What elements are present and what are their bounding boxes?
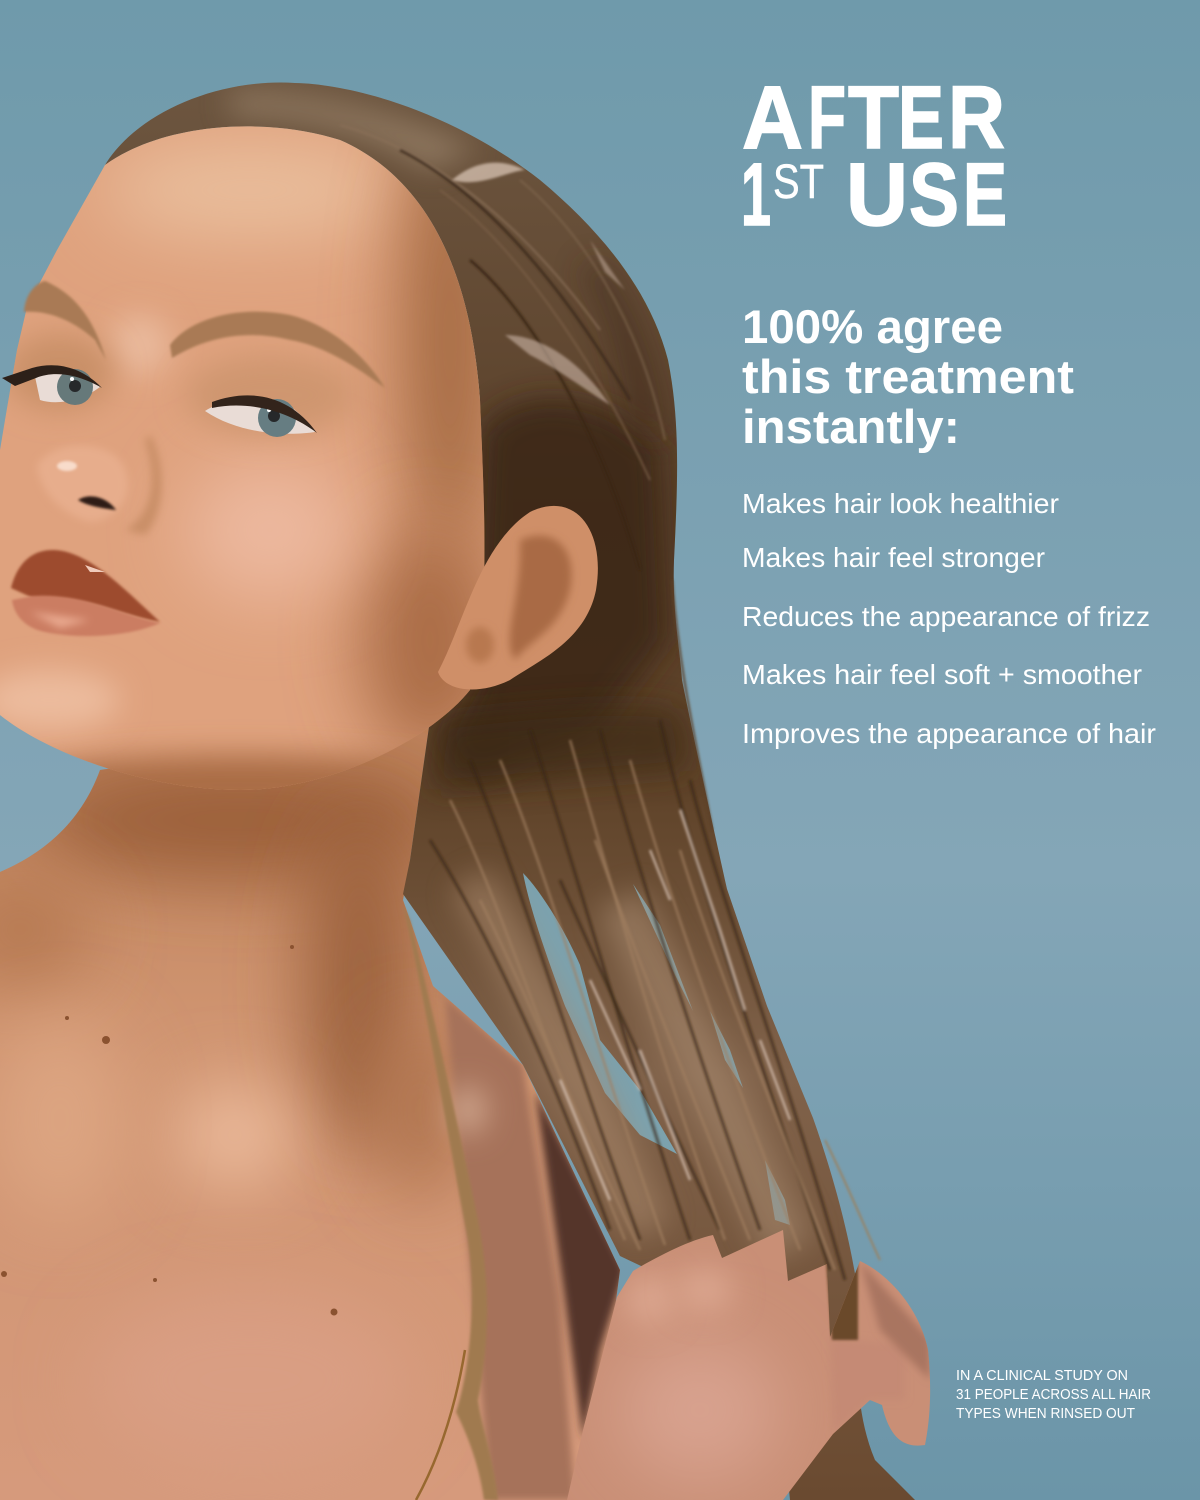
nose side shadow	[125, 435, 162, 535]
hand	[560, 1220, 940, 1500]
footnote: 31 PEOPLE ACROSS ALL HAIR	[956, 1387, 1151, 1403]
title: T	[848, 67, 899, 167]
title: E	[898, 67, 944, 167]
benefits list: Improves the appearance of hair	[742, 718, 1156, 749]
back shadow	[535, 1090, 625, 1440]
hair: fine strands on the lock	[430, 580, 880, 1280]
benefits list: Reduces the appearance of frizz	[742, 601, 1150, 632]
nostril	[78, 496, 116, 510]
hair: main mass and long lock	[105, 83, 915, 1500]
skin marks	[1, 945, 338, 1316]
lips	[11, 550, 160, 636]
photo: model with wet hair	[0, 0, 940, 1500]
title: R	[948, 67, 1005, 167]
hair: shading and sheen	[230, 92, 790, 1250]
title: A	[742, 67, 803, 167]
hair: conditioner patches on the crown	[452, 163, 625, 405]
title: E	[963, 144, 1007, 244]
heading: 100% agree: 100% agree	[742, 300, 1003, 353]
hair: fine strands on the crown	[340, 125, 665, 570]
title: S	[909, 144, 959, 244]
eyebrows	[24, 281, 385, 388]
title: 1	[741, 144, 771, 244]
eyes	[2, 365, 317, 437]
back shoulder	[433, 986, 575, 1500]
benefits list: Makes hair feel soft + smoother	[742, 659, 1142, 690]
heading: 100% agree: instantly:	[742, 400, 960, 453]
title: ST	[773, 156, 824, 209]
heading: 100% agree: this treatment	[742, 350, 1074, 403]
benefits list: Makes hair look healthier	[742, 488, 1059, 519]
ear	[438, 506, 598, 689]
footnote: IN A CLINICAL STUDY ON	[956, 1368, 1128, 1384]
shoulder highlight	[450, 1086, 486, 1134]
nose	[37, 446, 128, 522]
benefits list: Makes hair feel stronger	[742, 542, 1045, 573]
face	[0, 126, 484, 790]
title	[741, 67, 1007, 244]
hair: thin strands over chest	[403, 905, 498, 1500]
title: F	[808, 67, 846, 167]
heading: 100% agree	[742, 300, 1074, 453]
footnote: TYPES WHEN RINSED OUT	[956, 1406, 1135, 1422]
title: U	[846, 144, 908, 244]
hair: gaps of background between strands	[523, 873, 790, 1225]
footnote	[956, 1368, 1151, 1422]
eye sockets	[5, 334, 115, 410]
body: neck and chest	[0, 728, 620, 1500]
benefits list	[742, 488, 1156, 749]
